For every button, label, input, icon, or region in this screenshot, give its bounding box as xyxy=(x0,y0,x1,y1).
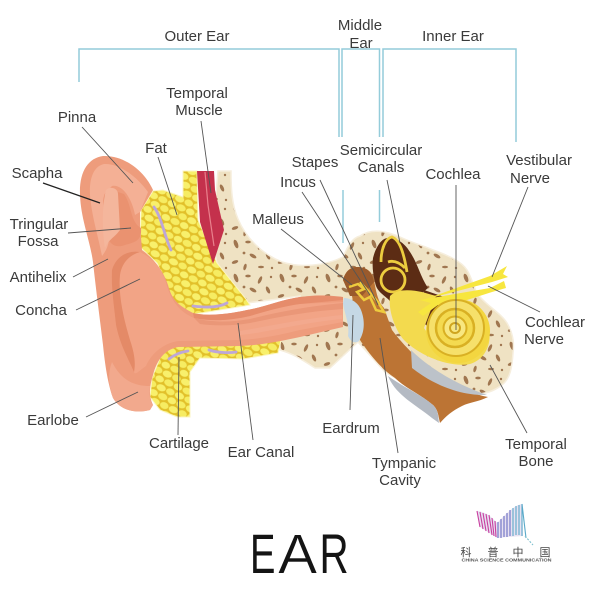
nerves xyxy=(418,266,508,316)
label: Temporal Muscle: Muscle xyxy=(175,102,223,119)
label: Semicircular Canals: Semicircular xyxy=(340,142,422,159)
cochlea spiral xyxy=(426,299,490,363)
title: A xyxy=(278,523,318,586)
helix fold xyxy=(90,164,148,256)
label: Pinna: Pinna xyxy=(58,109,97,126)
tympanic cavity xyxy=(343,267,488,423)
logo mark xyxy=(477,504,533,545)
label: Scapha: Scapha xyxy=(12,165,63,182)
logo Chinese name: 中 xyxy=(512,546,524,559)
label: Tympanic Cavity: Cavity xyxy=(379,472,421,489)
title: E xyxy=(250,524,275,586)
temporal muscle xyxy=(197,171,224,264)
label: Cochlear Nerve: Nerve xyxy=(524,331,564,348)
logo Chinese name: 科 xyxy=(460,545,472,559)
label: Tympanic Cavity: Tympanic xyxy=(372,455,436,472)
label: Outer Ear: Outer Ear xyxy=(164,28,230,45)
label: Middle Ear: Middle xyxy=(338,17,382,34)
label: Antihelix: Antihelix xyxy=(10,269,67,286)
label: Tringular Fossa: Fossa xyxy=(18,233,59,250)
label: Eardrum: Eardrum xyxy=(322,420,380,437)
illustration: ear cross-section xyxy=(80,156,513,423)
title xyxy=(250,523,349,586)
leader lines xyxy=(43,121,540,453)
label: Concha: Concha xyxy=(15,302,68,319)
label: Ear Canal: Ear Canal xyxy=(228,444,294,461)
logo English name: CHINA SCIENCE COMMUNICATION xyxy=(462,558,552,562)
inner ear: semicircular canals and cochlea xyxy=(373,237,508,365)
logo Chinese name: 普 xyxy=(488,545,498,559)
label: Temporal Bone: Temporal xyxy=(505,436,567,453)
label: Middle Ear: Ear xyxy=(349,35,373,52)
label: Temporal Muscle: Temporal xyxy=(166,85,228,102)
logo Chinese name: 国 xyxy=(540,546,550,559)
earlobe xyxy=(109,362,153,412)
label: Temporal Bone: Bone xyxy=(518,453,554,470)
logo: China Science Communication xyxy=(460,504,552,562)
label: Tringular Fossa: Tringular xyxy=(10,216,68,233)
label: Cartilage: Cartilage xyxy=(149,435,209,452)
ossicles xyxy=(349,282,384,312)
label: Inner Ear: Inner Ear xyxy=(422,28,484,45)
fat: lower tissue xyxy=(150,336,282,417)
concha and canal interior xyxy=(112,252,343,373)
label: Vestibular Nerve: Nerve xyxy=(510,170,550,187)
temporal bone: upper and surrounding xyxy=(212,171,513,394)
eardrum xyxy=(343,298,364,342)
cartilage strands xyxy=(154,207,236,359)
bracket: inner ear xyxy=(383,49,516,142)
bracket: middle ear xyxy=(342,49,380,222)
label: Vestibular Nerve: Vestibular xyxy=(506,152,572,169)
label: Earlobe: Earlobe xyxy=(27,412,79,429)
label: Stapes: Stapes xyxy=(292,154,338,171)
bracket: outer ear xyxy=(79,49,343,243)
gray cavity lining xyxy=(411,350,487,395)
label: Incus: Incus xyxy=(280,174,316,191)
pinna and ear canal xyxy=(80,156,343,412)
fat: upper tissue xyxy=(140,171,250,314)
middle ear dome xyxy=(343,267,374,296)
label: Fat: Fat xyxy=(145,140,168,157)
title: R xyxy=(320,524,349,586)
label: Malleus: Malleus xyxy=(252,211,304,228)
label: Cochlear Nerve: Cochlear xyxy=(525,314,585,331)
label: Semicircular Canals: Canals xyxy=(358,159,404,176)
tympanic gray membrane strip xyxy=(388,376,439,423)
label: Cochlea: Cochlea xyxy=(425,166,481,183)
